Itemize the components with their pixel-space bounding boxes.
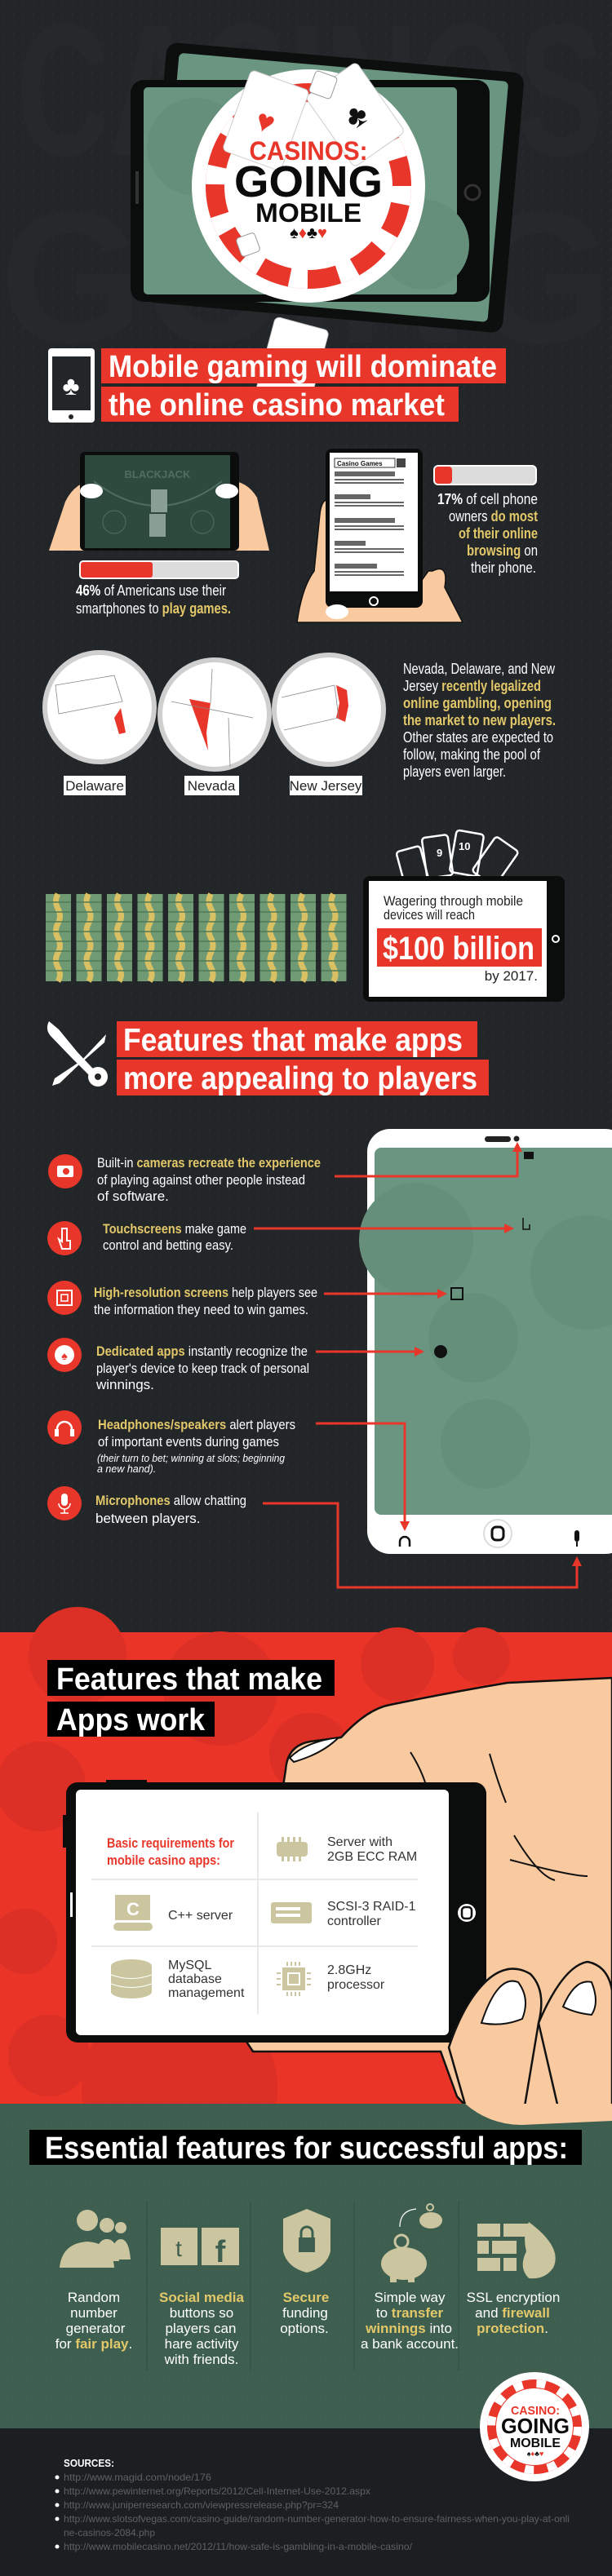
feature: touchscreens: control and betting easy. [103, 1237, 233, 1253]
maps: legalized states: Nevada [188, 778, 236, 794]
heading 3: features that make apps work: Features that make [56, 1662, 322, 1697]
map: Nevada [160, 660, 269, 769]
feature: headphones [47, 1410, 295, 1475]
feature column: random number generator: number [70, 2305, 118, 2321]
heading 1: mobile gaming will dominate: the online casino market [109, 388, 445, 423]
logo: small chip: CASINO: [511, 2404, 560, 2418]
background: faint giant letters: GOING [0, 173, 612, 383]
stat: 46% tablet with hands: BLACKJACK [125, 468, 191, 480]
stat: 17% phone browsing: their phone. [471, 560, 536, 576]
cards: ♥ [251, 103, 280, 142]
callout: $100 billion tablet: $100 billion [383, 931, 534, 967]
feature column: social media: hare activity [165, 2336, 239, 2352]
feature: dedicated apps: player's device to keep track of personal [96, 1361, 309, 1376]
logo: small chip: ♠♦♣♥ [527, 2450, 543, 2458]
feature column: random number generator [55, 2210, 132, 2352]
feature column: random number generator: generator [66, 2321, 126, 2336]
feature column: transfer winnings: winnings into [366, 2321, 452, 2336]
chip [192, 69, 425, 303]
icon: fanned cards: 9 [437, 847, 442, 859]
feature column: random number generator: for fair play. [55, 2336, 132, 2352]
panel: basic requirements grid: 2GB ECC RAM [327, 1850, 417, 1864]
feature column: transfer winnings: Simple way [375, 2290, 446, 2305]
panel: basic requirements grid: database [168, 1972, 222, 1986]
heading 3: features that make apps work: Apps work [56, 1703, 206, 1737]
section: green background [0, 2104, 612, 2428]
stat: 17% phone browsing: of their online [459, 525, 538, 542]
callout: $100 billion tablet: by 2017. [485, 968, 538, 984]
hero: tablets with casino chip logo: ♣ [338, 96, 375, 136]
title text: CASINOS: [250, 136, 367, 166]
stat: 17% phone browsing [297, 449, 542, 622]
heading 1: mobile gaming will dominate [48, 348, 506, 423]
back tablet [144, 42, 525, 334]
feature: cameras [48, 1154, 321, 1204]
hero: tablets with casino chip logo: ♦ [282, 349, 302, 381]
feature column: secure funding: funding [282, 2305, 328, 2321]
logo: small chip [480, 2372, 589, 2481]
sources list: ne-casinos-2084.php [64, 2527, 155, 2538]
panel: basic requirements grid: Basic requirements for [107, 1835, 234, 1851]
map: New Jersey [274, 655, 384, 764]
arrows: feature pointers [254, 1150, 577, 1587]
feature: microphones [47, 1486, 246, 1526]
feature column: SSL firewall: SSL encryption [467, 2290, 560, 2305]
feature column: transfer winnings: to transfer [376, 2305, 443, 2321]
panel: basic requirements grid: controller [327, 1914, 381, 1928]
title text: GOING [234, 157, 383, 206]
panel: basic requirements grid: MySQL [168, 1959, 211, 1972]
heading 3: features that make apps work [47, 1660, 335, 1737]
money stacks [46, 894, 346, 981]
heading 2: features that make apps more appealing [47, 1021, 489, 1096]
heading 2: features that make apps more appealing: Features that make apps [123, 1023, 463, 1058]
feature: microphones: Microphones allow chatting [95, 1493, 258, 1508]
panel: basic requirements grid: Server with [327, 1835, 392, 1849]
feature column: secure funding: options. [280, 2321, 329, 2336]
stat: 46% tablet with hands: smartphones to play games. [76, 600, 246, 617]
panel: basic requirements grid: processor [327, 1978, 385, 1992]
text: states legalization: the market to new players. [403, 712, 556, 728]
feature column: social media: Social media [159, 2290, 245, 2305]
callout: $100 billion tablet: devices will reach [384, 907, 475, 923]
icon: phone with club: ♣ [62, 371, 80, 401]
feature column: SSL firewall [467, 2222, 560, 2336]
text: states legalization: online gambling, opening [403, 695, 552, 711]
text: states legalization: Nevada, Delaware, and New [403, 661, 556, 677]
feature column: SSL firewall: protection. [477, 2321, 548, 2336]
feature: headphones: Headphones/speakers alert players [98, 1417, 306, 1432]
sources list: http://www.juniperresearch.com/viewpressrelease.php?pr=324 [64, 2499, 339, 2511]
text: states legalization: Jersey recently legalized [403, 678, 564, 694]
background: faint giant letters [0, 0, 612, 383]
feature: cameras: Built-in cameras recreate the experience [97, 1155, 352, 1171]
feature column: social media: t [175, 2236, 182, 2261]
feature column: social media: buttons so [170, 2305, 233, 2321]
heading 2: features that make apps more appealing: more appealing to players [123, 1061, 477, 1096]
hero: tablets with casino chip logo [131, 42, 525, 409]
front tablet [131, 80, 490, 302]
icon: phone with club [48, 348, 95, 423]
panel: basic requirements grid: 2.8GHz [327, 1963, 371, 1977]
section: red background [0, 1632, 612, 2104]
sources list: SOURCES: [64, 2457, 114, 2469]
feature: cameras: of playing against other people instead [97, 1172, 305, 1188]
title text: ♠♦♣♥ [290, 224, 327, 242]
feature column: transfer winnings: a bank account. [361, 2336, 459, 2352]
panel: basic requirements grid: C [126, 1899, 140, 1919]
text: states legalization: Other states are expected to [403, 729, 553, 746]
panel: basic requirements grid: mobile casino apps: [107, 1852, 220, 1868]
stat: 17% phone browsing: owners do most [449, 508, 548, 524]
feature: dedicated apps: ♠ [61, 1349, 68, 1362]
feature: dedicated apps: Dedicated apps instantly recognize the [96, 1343, 327, 1359]
feature column: random number generator: Random [68, 2290, 120, 2305]
icon: fanned cards [396, 830, 519, 887]
title text [234, 136, 383, 242]
heading 4: essential features: Essential features for successful apps: [45, 2131, 568, 2166]
panel: basic requirements grid: C++ server [168, 1909, 233, 1923]
feature column: social media: with friends. [164, 2352, 238, 2367]
title text: MOBILE [255, 198, 361, 228]
sources list [55, 2457, 572, 2552]
feature: dedicated apps: winnings. [95, 1377, 154, 1392]
cards [222, 69, 310, 171]
maps: legalized states: Delaware [65, 778, 124, 794]
feature: headphones: a new hand). [97, 1463, 156, 1475]
feature: cameras: of software. [97, 1188, 169, 1204]
callout: $100 billion tablet [363, 876, 565, 1002]
feature: headphones: (their turn to bet; winning at slots; beginning [97, 1453, 285, 1464]
feature: high-resolution screens: the information they need to win games. [94, 1302, 308, 1317]
stat: 46% tablet with hands [49, 452, 269, 617]
logo: small chip: GOING [501, 2414, 570, 2438]
feature column: social media: players can [166, 2321, 236, 2336]
feature column: transfer winnings [361, 2204, 459, 2352]
feature column: SSL firewall: and firewall [475, 2305, 550, 2321]
panel: basic requirements grid [91, 1812, 418, 2014]
text: states legalization: players even larger. [403, 764, 506, 780]
icon: fanned cards: 10 [459, 840, 470, 852]
device: tablet with feature points [359, 1129, 612, 1554]
sources list: http://www.pewinternet.org/Reports/2012/Cell-Internet-Use-2012.aspx [64, 2485, 370, 2497]
panel: basic requirements grid: SCSI-3 RAID-1 [327, 1900, 416, 1914]
icon: wrench and screwdriver [47, 1021, 108, 1087]
sources list: http://www.mobilecasino.net/2012/11/how-safe-is-gambling-in-a-mobile-casino/ [64, 2541, 413, 2552]
feature: high-resolution screens: High-resolution screens help players see [94, 1285, 334, 1300]
callout: $100 billion tablet: Wagering through mobile [384, 893, 523, 909]
stat: 17% phone browsing: 17% of cell phone [437, 491, 550, 507]
illustration: hand holding phone [63, 1678, 612, 2131]
feature: touchscreens [47, 1221, 246, 1255]
feature column: secure funding: Secure [283, 2290, 329, 2305]
feature: high-resolution screens [47, 1281, 317, 1317]
map: Delaware [45, 653, 154, 762]
feature: headphones: of important events during games [98, 1434, 279, 1450]
logo: small chip: MOBILE [510, 2437, 561, 2450]
feature: touchscreens: Touchscreens make game [103, 1221, 258, 1237]
heading 1: mobile gaming will dominate: Mobile gaming will dominate [109, 350, 497, 384]
feature column: secure funding [280, 2209, 330, 2336]
background: dark top section [0, 0, 612, 1632]
text: states legalization: follow, making the pool of [403, 746, 541, 763]
feature column: social media [159, 2228, 245, 2367]
stat: 46% tablet with hands: 46% of Americans use their [76, 582, 250, 599]
feature column: social media: f [215, 2235, 226, 2269]
section: dark footer [0, 2428, 612, 2576]
maps: legalized states [45, 653, 384, 795]
feature: dedicated apps [47, 1338, 309, 1392]
sources list: http://www.slotsofvegas.com/casino-guide/random-number-generator-how-to-ensure-fairness-when-you-play-at-onli [64, 2513, 570, 2525]
panel: basic requirements grid: management [168, 1986, 245, 2000]
stat: 17% phone browsing: browsing on [467, 542, 541, 559]
maps: legalized states: New Jersey [290, 778, 362, 794]
feature: microphones: between players. [95, 1511, 201, 1526]
sources list: http://www.magid.com/node/176 [64, 2472, 211, 2483]
stat: 17% phone browsing: Casino Games [337, 460, 383, 467]
